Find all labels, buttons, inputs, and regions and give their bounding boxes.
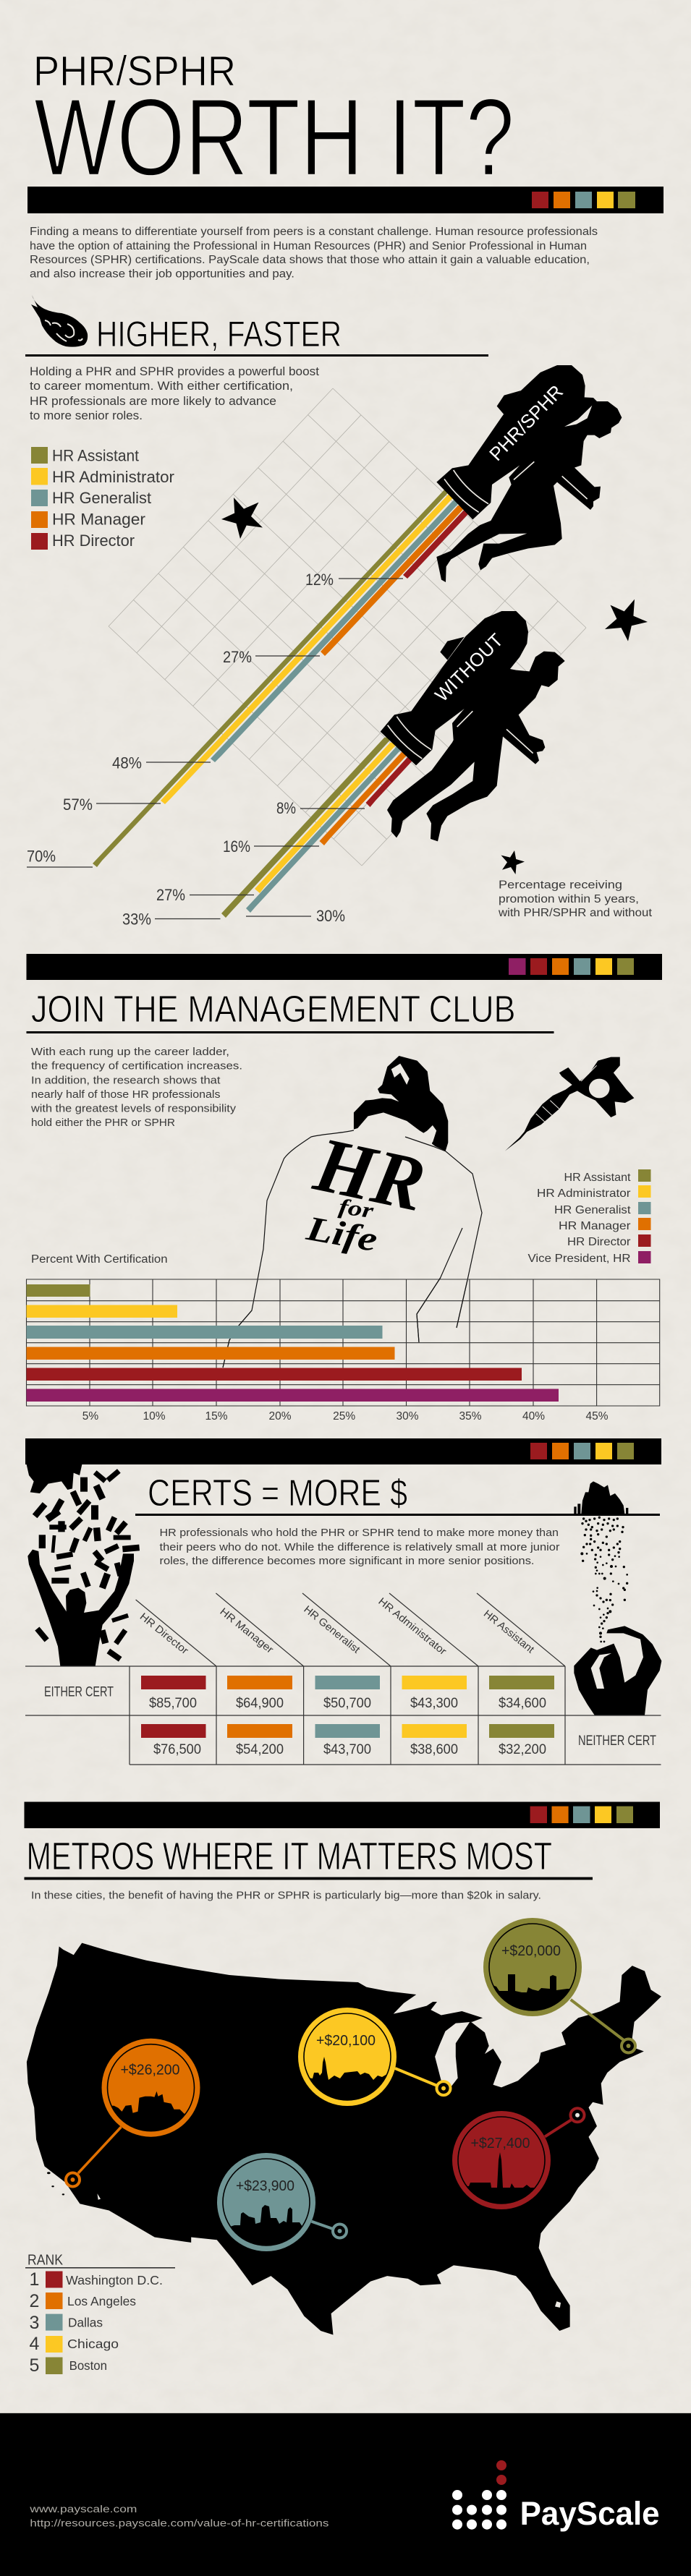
legend: city rank: Washington D.C. — [66, 2273, 163, 2287]
chart axis labels: 5% — [82, 1410, 98, 1423]
callout: Boston +$20,000 — [482, 1918, 635, 2052]
legend: city rank: 4 — [30, 2334, 40, 2354]
row: either cert: $34,600 — [499, 1695, 546, 1711]
legend: city rank — [25, 2252, 175, 2376]
column headers: HR Assistant — [481, 1608, 536, 1655]
footer band — [0, 2413, 691, 2576]
column headers: HR Director — [137, 1611, 190, 1657]
heading: join the management club: JOIN THE MANAGEMENT CLUB — [31, 988, 515, 1030]
figure: man with WITHOUT jetpack: WITHOUT — [431, 629, 507, 706]
icon: tattoo machine — [505, 1057, 634, 1151]
data labels: with PHR/SPHR: 12% — [305, 571, 334, 589]
row: neither cert — [141, 1724, 656, 1757]
figure: woman with PHR/SPHR jetpack — [436, 365, 622, 582]
row: neither cert: $38,600 — [410, 1741, 458, 1757]
table lines — [25, 1593, 661, 1765]
heading: certs = more $ — [135, 1472, 660, 1516]
row: neither cert: $76,500 — [153, 1741, 201, 1757]
legend: city rank: RANK — [27, 2252, 64, 2268]
text block: career momentum: to career momentum. With either certification, — [30, 379, 293, 393]
column headers: HR Generalist — [301, 1604, 362, 1656]
row: neither cert: $32,200 — [499, 1741, 546, 1757]
text: metros intro: In these cities, the benefit of having the PHR or SPHR is particularly big—more than $20k in salary. — [31, 1889, 541, 1902]
row: either cert — [44, 1676, 554, 1711]
heading: higher, faster — [25, 314, 488, 357]
callout: Washington D.C. +$27,400 — [451, 2108, 585, 2211]
callout: Los Angeles +$26,200: +$26,200 — [120, 2063, 179, 2078]
chart title: Percent With Certification — [31, 1253, 168, 1266]
figure: coin pile, falling coins and person — [574, 1481, 661, 1715]
title: PHR/SPHR — [33, 48, 236, 95]
chart: promotion streaks with PHR/SPHR — [93, 484, 478, 867]
data labels: with PHR/SPHR: 48% — [112, 754, 142, 772]
footer links — [29, 2504, 329, 2528]
text block: certification frequency: nearly half of those HR professionals — [31, 1088, 220, 1101]
icon: flourish — [31, 295, 88, 347]
legend: job roles: HR Assistant — [52, 447, 139, 464]
data labels: with PHR/SPHR — [27, 571, 403, 867]
footer links: http://resources.payscale.com/value-of-hr-certifications — [30, 2518, 329, 2528]
data labels: without certification: 30% — [316, 907, 345, 925]
callout: Dallas +$23,900 — [216, 2153, 347, 2253]
chart: promotion streaks without certification — [221, 735, 420, 918]
caption with star — [498, 850, 653, 919]
text block: career momentum: Holding a PHR and SPHR provides a powerful boost — [30, 364, 319, 378]
intro text: have the option of attaining the Professional in Human Resources (PHR) and Senior Professional in Human — [30, 240, 587, 252]
icon: star — [221, 498, 263, 539]
row: either cert: $85,700 — [149, 1695, 197, 1711]
figure: man with WITHOUT jetpack — [381, 611, 565, 841]
header bar with colour swatches — [27, 187, 664, 213]
data labels: with PHR/SPHR: 57% — [63, 796, 93, 814]
icon: star right — [605, 600, 648, 641]
map: United States silhouette — [27, 1943, 661, 2335]
text block: career momentum — [30, 364, 319, 422]
legend: city rank: Boston — [69, 2358, 107, 2373]
text block: career momentum: HR professionals are more likely to advance — [30, 394, 276, 408]
legend: roles with certification: HR Director — [567, 1236, 631, 1248]
data labels: with PHR/SPHR: 70% — [27, 848, 56, 865]
chart axis labels — [82, 1410, 609, 1423]
intro text: Resources (SPHR) certifications. PayScale data shows that those who attain it gain a valuable education, — [30, 254, 590, 266]
text block: certification frequency: With each rung up the career ladder, — [31, 1046, 229, 1058]
text block: certification frequency: the frequency of certification increases. — [31, 1060, 242, 1072]
legend: job roles — [31, 447, 174, 550]
callout: Dallas +$23,900: +$23,900 — [236, 2178, 294, 2194]
footer links: www.payscale.com — [29, 2504, 137, 2515]
column headers: HR Administrator — [376, 1596, 449, 1658]
caption with star: Percentage receiving — [499, 879, 622, 891]
intro text: Finding a means to differentiate yourself from peers is a constant challenge. Human resource professionals — [30, 226, 598, 238]
section bar: management club — [26, 954, 662, 980]
intro text — [30, 226, 598, 281]
row: either cert: $43,300 — [410, 1695, 458, 1711]
salary table — [25, 1593, 661, 1765]
title: WORTH IT? — [34, 76, 514, 199]
text block: salary difference: HR professionals who hold the PHR or SPHR tend to make more money than — [159, 1527, 559, 1539]
chart axis labels: 35% — [459, 1410, 482, 1423]
chart axis labels: 15% — [205, 1410, 228, 1423]
caption with star: with PHR/SPHR and without — [498, 907, 653, 919]
callout: Chicago +$20,100 — [297, 2008, 450, 2107]
legend: city rank: 1 — [30, 2269, 39, 2290]
column headers — [137, 1596, 536, 1658]
legend: job roles: HR Generalist — [52, 489, 151, 507]
row: neither cert: $43,700 — [323, 1741, 371, 1757]
row: neither cert: NEITHER CERT — [578, 1733, 656, 1749]
section bar: metros — [25, 1802, 660, 1828]
legend: roles with certification — [528, 1169, 651, 1265]
heading: higher, faster: HIGHER, FASTER — [96, 314, 342, 354]
title — [33, 48, 514, 199]
text block: career momentum: to more senior roles. — [30, 409, 143, 422]
figure: woman with PHR/SPHR jetpack: PHR/SPHR — [485, 380, 567, 465]
intro text: and also increase their job opportunities and pay. — [30, 268, 294, 281]
figure: woman's back outline with hair — [223, 1056, 482, 1368]
chart axis labels: 20% — [268, 1410, 292, 1423]
legend: city rank: 5 — [30, 2355, 39, 2376]
legend: city rank: Dallas — [68, 2316, 103, 2330]
chart axis labels: 45% — [585, 1410, 609, 1423]
legend: city rank: Los Angeles — [67, 2294, 136, 2308]
data labels: without certification — [122, 799, 365, 929]
callout: Washington D.C. +$27,400: +$27,400 — [470, 2136, 530, 2151]
text block: certification frequency — [30, 1046, 242, 1129]
legend: job roles: HR Administrator — [52, 468, 174, 486]
legend: job roles: HR Manager — [52, 511, 145, 528]
legend: roles with certification: Vice President, HR — [528, 1253, 631, 1265]
text block: salary difference — [159, 1527, 560, 1567]
tattoo lettering: HR for Life: for — [337, 1195, 376, 1223]
row: either cert: $50,700 — [323, 1695, 371, 1711]
chart axis labels: 30% — [396, 1410, 419, 1423]
text block: certification frequency: In addition, the research shows that — [31, 1075, 221, 1087]
caption with star: promotion within 5 years, — [499, 893, 639, 905]
callout: Los Angeles +$26,200 — [66, 2039, 201, 2187]
callout: Boston +$20,000: +$20,000 — [501, 1943, 561, 1959]
data labels: with PHR/SPHR: 27% — [223, 648, 252, 666]
figure: person throwing money — [27, 1464, 140, 1666]
legend: city rank: 2 — [30, 2291, 39, 2311]
legend: job roles: HR Director — [52, 532, 135, 550]
text block: certification frequency: hold either the PHR or SPHR — [31, 1117, 175, 1129]
row: neither cert: $54,200 — [236, 1741, 284, 1757]
legend: roles with certification: HR Manager — [559, 1220, 631, 1232]
row: either cert: EITHER CERT — [44, 1684, 114, 1700]
data labels: without certification: 33% — [122, 910, 151, 929]
section bar: certs more money — [25, 1438, 661, 1464]
legend: roles with certification: HR Assistant — [564, 1172, 631, 1184]
bar chart: percent with certification — [26, 1278, 660, 1406]
text block: certification frequency: with the greatest levels of responsibility — [30, 1102, 237, 1115]
text block: salary difference: their peers who do not. While the difference is relatively small at more junior — [159, 1542, 560, 1553]
PayScale logo: PayScale — [520, 2495, 660, 2532]
tattoo lettering: HR for Life: HR — [307, 1121, 432, 1228]
legend: city rank: 3 — [30, 2313, 39, 2333]
text block: salary difference: roles, the difference becomes more significant in more senior positions. — [159, 1556, 534, 1567]
chart axis labels: 25% — [333, 1410, 355, 1423]
chart grid: diamond lattice — [109, 388, 586, 866]
row: either cert: $64,900 — [236, 1695, 284, 1711]
chart axis labels: 10% — [143, 1410, 166, 1423]
legend: city rank: Chicago — [67, 2337, 119, 2351]
data labels: without certification: 16% — [223, 837, 250, 856]
column headers: HR Manager — [217, 1606, 276, 1656]
legend: roles with certification: HR Administrator — [537, 1187, 631, 1200]
tattoo lettering: HR for Life: Life — [303, 1209, 381, 1259]
PayScale logo — [452, 2460, 660, 2532]
chart axis labels: 40% — [522, 1410, 545, 1423]
callout: Chicago +$20,100: +$20,100 — [316, 2033, 376, 2049]
heading: certs = more $: CERTS = MORE $ — [148, 1472, 407, 1514]
legend: roles with certification: HR Generalist — [554, 1204, 631, 1216]
data labels: without certification: 27% — [156, 886, 185, 904]
data labels: without certification: 8% — [276, 799, 296, 817]
